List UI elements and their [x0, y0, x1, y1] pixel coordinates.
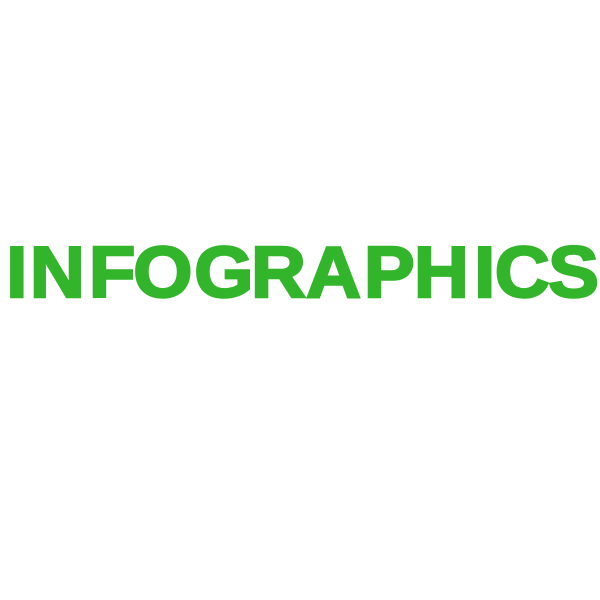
title: INFOGRAPHICS — [6, 231, 599, 312]
